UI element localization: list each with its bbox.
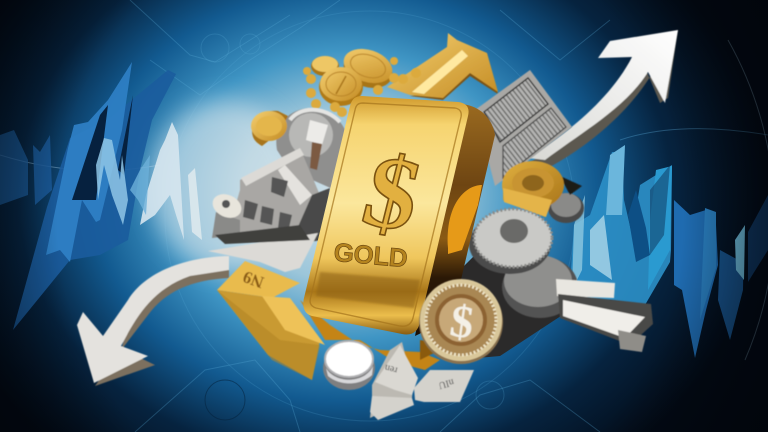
coin: front [319,67,363,106]
gold bar: main [303,96,495,336]
right-hand metal objects [469,70,653,352]
silver pieces bottom [323,341,474,420]
dollar coin: $ [447,295,477,348]
house with clock dial and coin [208,108,345,272]
icon: silver plate with comb [556,279,653,352]
icon: grey dial behind house [276,108,345,190]
chart: rising blue spikes, right [571,145,768,358]
silver round nugget [323,341,375,390]
icon: house [225,148,330,245]
shard: centre: ren [384,362,399,376]
coin: small left [311,56,339,76]
shard: right: nIU [436,376,455,391]
gold nuggets [303,57,421,117]
dollar sign on bar: $ [353,132,432,254]
dark mass behind right-hand gears [440,230,570,360]
icon: gold coin on dial [251,111,288,146]
icon: silver gear lower [502,255,578,318]
glow: pale light left of the pile [150,100,300,270]
shard: centre [370,342,418,420]
blade: silver wedge under house [208,233,318,272]
arrow: white falling arrow [77,256,229,386]
shard: right [414,370,474,402]
dollar coin [419,279,503,364]
gold arrow [387,33,498,100]
icon: gold coin right [502,161,564,217]
gold ingot lower left [217,261,325,380]
chart: falling blue spikes, left [0,62,202,330]
panel: grey calculator sheet [475,70,572,186]
coin: large right [339,43,397,94]
icon: silver gear middle [469,209,552,274]
icon: dark washer behind gold coin [548,176,584,223]
coin pile: top gold coins [303,43,421,117]
arrow: white rising arrow [525,30,678,172]
icon: small silver dish [209,190,245,238]
gold melt pool under bar [300,300,450,370]
bar front [303,96,469,334]
bar side [415,104,495,336]
gold ingot lower left: N9 [240,267,266,292]
GOLD label on bar: GOLD [333,237,409,273]
